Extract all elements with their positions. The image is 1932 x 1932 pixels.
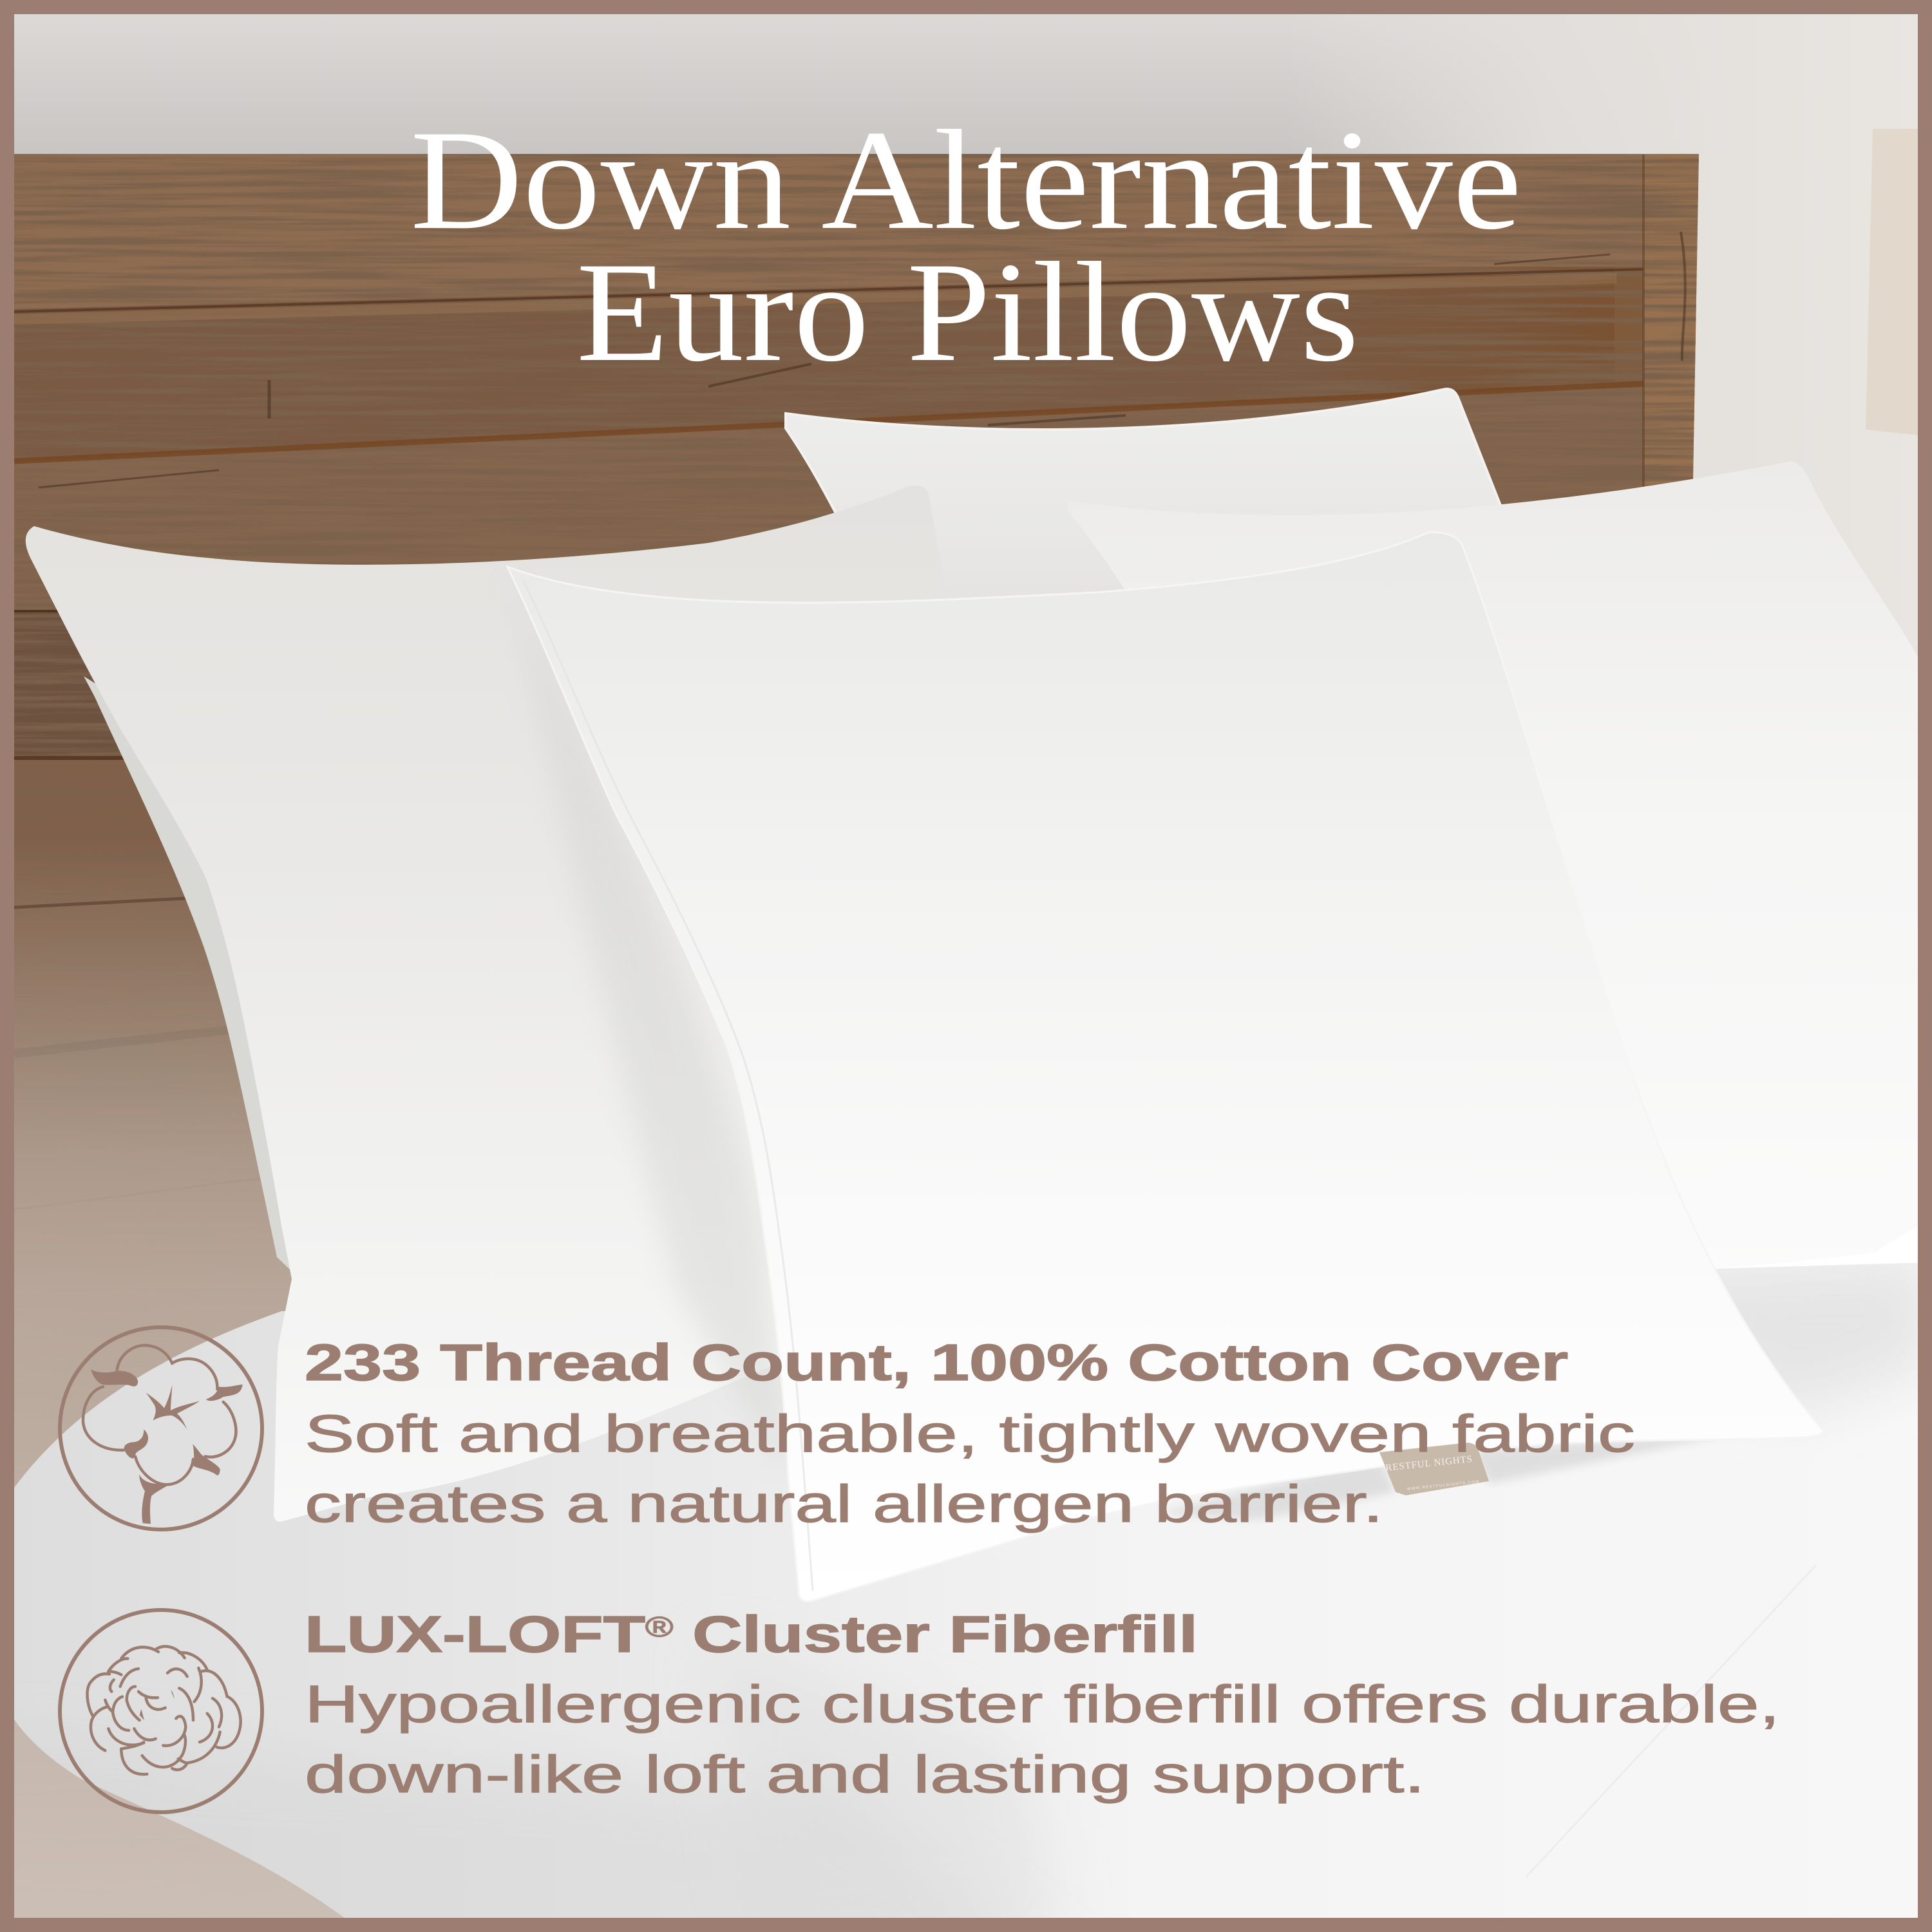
heading: thread count: 233 Thread Count, 100% Cotton Cover bbox=[305, 1334, 1568, 1391]
title bbox=[410, 101, 1522, 392]
icon: cotton boll bbox=[60, 1327, 262, 1530]
brand tag bbox=[1379, 1443, 1489, 1495]
pillow: left back face bbox=[84, 676, 309, 1288]
lamp shade bbox=[1866, 129, 1926, 436]
brand tag: RESTFUL NIGHTS bbox=[1385, 1454, 1473, 1473]
text: cover description: Soft and breathable, tightly woven fabric bbox=[305, 1405, 1635, 1463]
wood streaks and knots bbox=[39, 232, 1685, 488]
sheet shading bbox=[381, 1263, 1918, 1918]
text: cover description: creates a natural allergen barrier. bbox=[305, 1475, 1383, 1533]
plank grooves bbox=[14, 155, 1687, 1055]
pillow: right bbox=[1068, 461, 1932, 1278]
background wall bbox=[0, 0, 1932, 773]
pillow: front bbox=[507, 532, 1823, 1602]
text: fiberfill description: Hypoallergenic cluster fiberfill offers durable, bbox=[305, 1675, 1780, 1734]
text: cover description bbox=[305, 1405, 1635, 1533]
text: fiberfill description: down-like loft and lasting support. bbox=[305, 1745, 1425, 1804]
icon: fiberfill cluster bbox=[60, 1610, 262, 1812]
text: fiberfill description bbox=[305, 1675, 1780, 1804]
pillow shadow bbox=[507, 567, 788, 1479]
title: Down Alternative bbox=[410, 101, 1522, 260]
wedge shadow under front pillow bbox=[1159, 1432, 1739, 1520]
bed sheet bbox=[0, 1256, 1932, 1932]
title: Euro Pillows bbox=[576, 233, 1359, 392]
pillow: left bbox=[26, 486, 966, 1522]
heading: lux-loft: ® bbox=[645, 1611, 673, 1643]
feature: cluster fiberfill bbox=[60, 1605, 1780, 1812]
heading: lux-loft: LUX-LOFT bbox=[305, 1605, 559, 1663]
heading: lux-loft: Cluster Fiberfill bbox=[673, 1605, 1198, 1663]
brand tag: WWW.RESTFULNIGHTS.COM bbox=[1407, 1480, 1479, 1492]
pillow piping detail bbox=[523, 580, 813, 1591]
feature: cotton cover bbox=[60, 1327, 1635, 1533]
pillow: back centre bbox=[786, 389, 1504, 708]
